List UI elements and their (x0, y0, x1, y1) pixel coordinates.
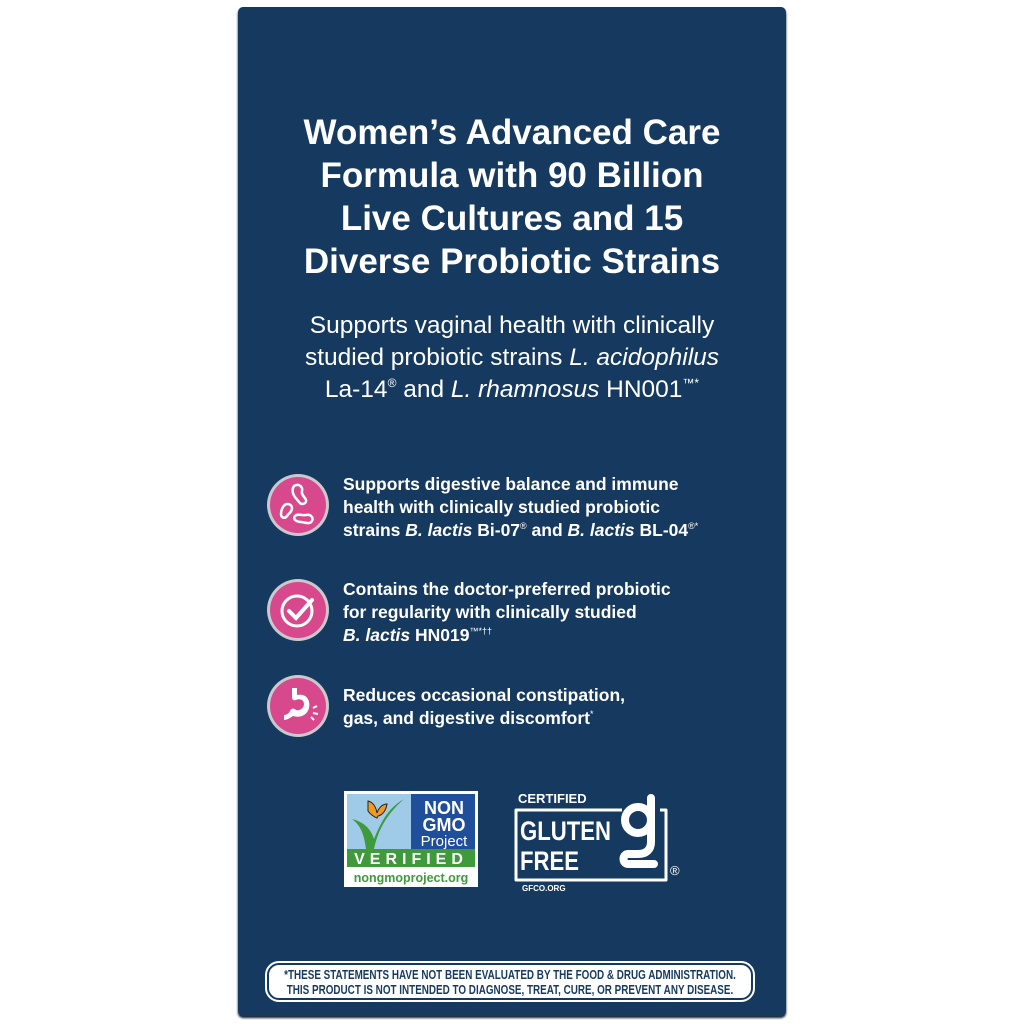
logo: Non GMO Project: Project (421, 833, 468, 850)
logo: Non GMO Project: VERIFIED (354, 851, 468, 868)
disclaimer: *THESE STATEMENTS HAVE NOT BEEN EVALUATED BY THE FOOD & DRUG ADMINISTRATION. (284, 967, 736, 982)
bullet text 1: health with clinically studied probiotic (343, 497, 660, 517)
title: Diverse Probiotic Strains (304, 242, 720, 281)
title: Live Cultures and 15 (341, 199, 683, 238)
title: Formula with 90 Billion (320, 156, 704, 195)
logo: Non GMO Project: GMO (422, 815, 466, 835)
logo: Non GMO Project: NON (424, 798, 464, 818)
subtitle: studied probiotic strains L. acidophilus (305, 344, 719, 371)
icon: probiotic strains (267, 474, 329, 536)
logo: Certified Gluten Free: GLUTEN (520, 817, 611, 847)
logo: Certified Gluten Free (514, 791, 680, 893)
logo: Non GMO Project (344, 791, 478, 887)
bullet text 3 (343, 685, 625, 728)
panel: product box (238, 7, 786, 1016)
title (304, 113, 720, 281)
subtitle: Supports vaginal health with clinically (310, 312, 714, 339)
logo: Certified Gluten Free: ® (670, 863, 680, 878)
bullet text 1: Supports digestive balance and immune (343, 474, 678, 494)
bullet text 2: Contains the doctor-preferred probiotic (343, 579, 671, 599)
title: Women’s Advanced Care (304, 113, 720, 152)
bullet text 1 (343, 474, 698, 540)
logo: Non GMO Project: nongmoproject.org (354, 871, 468, 885)
disclaimer (267, 963, 753, 1000)
subtitle (305, 312, 719, 403)
logo: Certified Gluten Free: CERTIFIED (518, 791, 587, 806)
bullet text 3: gas, and digestive discomfort* (343, 708, 594, 728)
bullet text 2: B. lactis HN019™*†† (343, 625, 492, 645)
disclaimer: THIS PRODUCT IS NOT INTENDED TO DIAGNOSE, TREAT, CURE, OR PREVENT ANY DISEASE. (287, 982, 733, 997)
bullet text 3: Reduces occasional constipation, (343, 685, 625, 705)
bullet text 2 (343, 579, 671, 645)
logo: Certified Gluten Free: GFCO.ORG (522, 884, 566, 893)
icon: check (267, 579, 329, 641)
bullet text 1: strains B. lactis Bi-07® and B. lactis BL-04®* (343, 520, 698, 540)
subtitle: La-14® and L. rhamnosus HN001™* (325, 376, 699, 403)
icon: stomach (267, 675, 329, 737)
logo: Certified Gluten Free: FREE (520, 847, 579, 877)
bullet text 2: for regularity with clinically studied (343, 602, 637, 622)
